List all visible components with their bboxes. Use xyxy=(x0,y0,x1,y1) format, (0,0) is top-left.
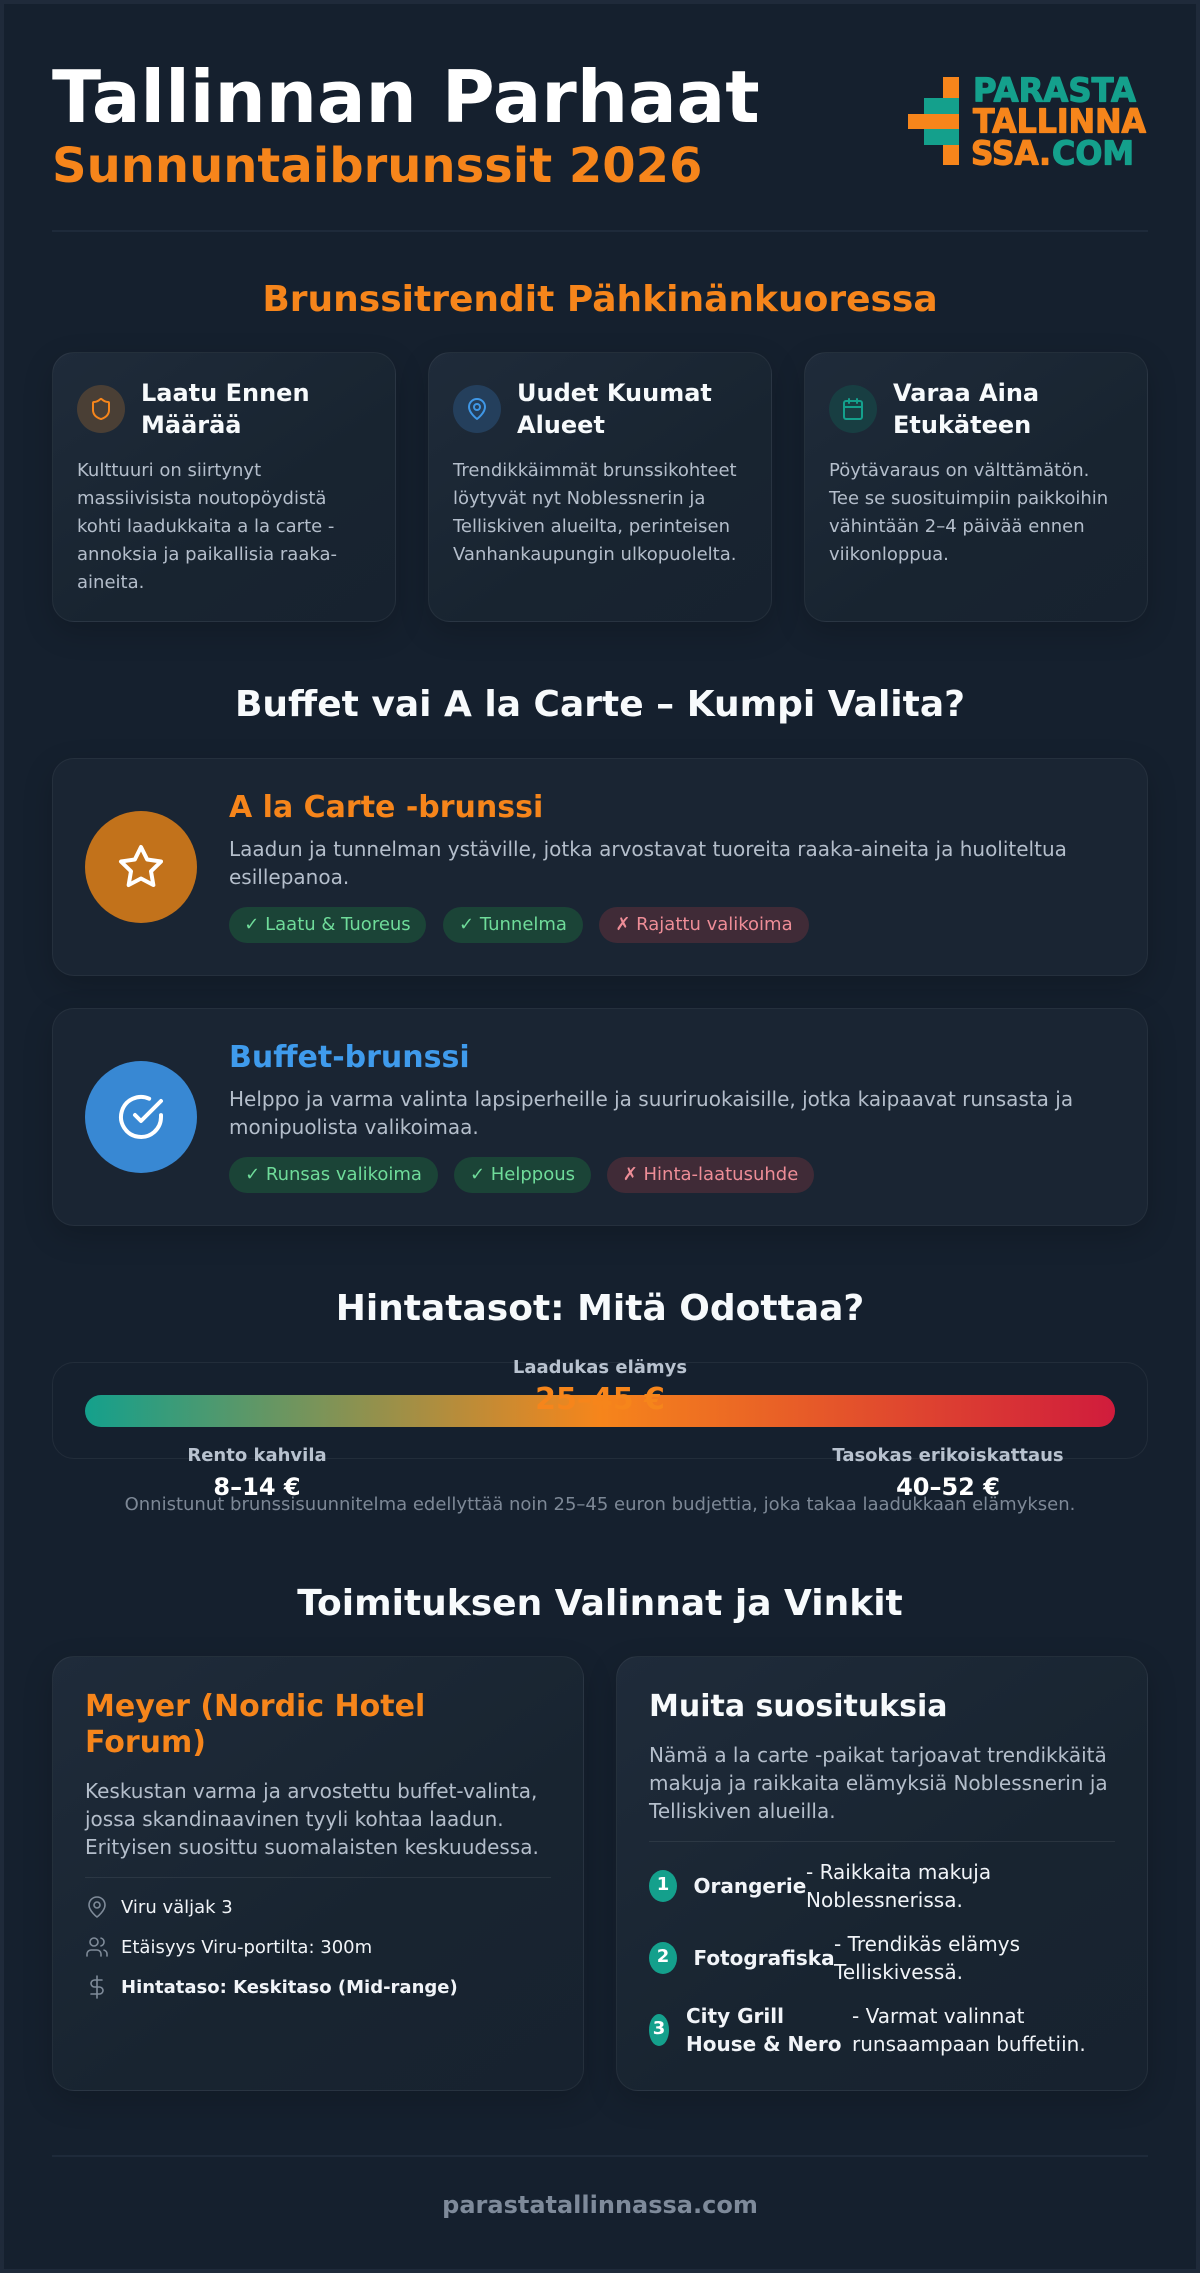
panel: price scale xyxy=(52,1362,1148,1459)
panel title: Muita suosituksia xyxy=(649,1689,948,1724)
card title xyxy=(141,379,310,438)
heading: trends: Brunssitrendit Pähkinänkuoressa xyxy=(262,279,938,320)
option text: esillepanoa. xyxy=(229,865,349,889)
card title: Uudet Kuumat xyxy=(517,379,712,407)
logo xyxy=(908,70,1146,172)
tag xyxy=(454,1157,591,1193)
card text: aineita. xyxy=(77,572,144,593)
card text: massiivisista noutopöydistä xyxy=(77,488,326,509)
price note: Onnistunut brunssisuunnitelma edellyttää noin 25–45 euron budjettia, joka takaa laadukkaan elämyksen. xyxy=(125,1494,1075,1515)
pick name: Fotografiska xyxy=(694,1946,835,1970)
panel: Meyer xyxy=(52,1656,584,2091)
panel: buffet xyxy=(52,1008,1148,1226)
card text: vähintään 2–4 päivää ennen xyxy=(829,516,1085,537)
tag: ✗ Rajattu valikoima xyxy=(615,914,793,935)
card text: Pöytävaraus on välttämätön. xyxy=(829,460,1089,481)
logo: COM xyxy=(1052,134,1134,172)
panel text: makuja ja raikkaita elämyksiä Noblessnerin ja xyxy=(649,1771,1108,1795)
pick text xyxy=(806,1860,991,1912)
subtitle: Sunnuntaibrunssit 2026 xyxy=(52,138,702,194)
panel: other picks xyxy=(616,1656,1148,2091)
footer: parastatallinnassa.com xyxy=(442,2191,758,2219)
title: Tallinnan Parhaat xyxy=(52,55,760,139)
option title: Buffet-brunssi xyxy=(229,1040,470,1075)
pick name: House & Nero xyxy=(686,2032,841,2056)
distance row xyxy=(86,1937,372,1958)
price value: mid: 25–45 € xyxy=(535,1382,665,1417)
pick text: runsaampaan buffetiin. xyxy=(852,2032,1086,2056)
pick text: - Trendikäs elämys xyxy=(834,1932,1020,1956)
tag xyxy=(443,907,583,943)
icon: map pin xyxy=(453,384,501,432)
pick name: Orangerie xyxy=(694,1874,806,1898)
panel: Meyer: Hintataso: Keskitaso (Mid-range) xyxy=(121,1977,458,1998)
option text xyxy=(229,1087,1073,1139)
panel text: Nämä a la carte -paikat tarjoavat trendikkäitä xyxy=(649,1743,1107,1767)
card title: Laatu Ennen xyxy=(141,379,310,407)
badge: 1 xyxy=(657,1874,669,1895)
badge xyxy=(649,2014,669,2046)
pick name xyxy=(686,2004,841,2056)
badge: 3 xyxy=(653,2018,665,2039)
price value: high: 40–52 € xyxy=(896,1473,1000,1501)
logo: PARASTA xyxy=(973,70,1136,110)
option title: A la Carte -brunssi xyxy=(229,790,543,825)
option text: Helppo ja varma valinta lapsiperheille ja suuriruokaisille, jotka kaipaavat runsasta ja xyxy=(229,1087,1073,1111)
pick name: City Grill xyxy=(686,2004,784,2028)
panel: trend 3 xyxy=(804,352,1148,622)
venue text: jossa skandinaavinen tyyli kohtaa laadun. xyxy=(85,1807,504,1831)
heading: picks: Toimituksen Valinnat ja Vinkit xyxy=(297,1583,903,1624)
tag xyxy=(607,1157,814,1193)
venue text: Erityisen suosittu suomalaisten keskuudessa. xyxy=(85,1835,539,1859)
badge: 2 xyxy=(657,1946,669,1967)
card text: Kulttuuri on siirtynyt xyxy=(77,460,261,481)
tag xyxy=(229,1157,438,1193)
card text: viikonloppua. xyxy=(829,544,949,565)
venue text xyxy=(84,1779,539,1859)
card text xyxy=(77,460,337,593)
heading: comparison: Buffet vai A la Carte – Kumpi Valita? xyxy=(235,684,965,725)
option text: Laadun ja tunnelman ystäville, jotka arvostavat tuoreita raaka-aineita ja huoliteltua xyxy=(229,837,1067,861)
card text: Trendikkäimmät brunssikohteet xyxy=(453,460,737,481)
pick 2 xyxy=(649,1932,1020,1984)
option text: monipuolista valikoimaa. xyxy=(229,1115,479,1139)
address row xyxy=(88,1896,233,1918)
card text: Vanhankaupungin ulkopuolelta. xyxy=(453,544,736,565)
panel text xyxy=(648,1743,1108,1823)
tag xyxy=(229,907,426,943)
tag: ✓ Helppous xyxy=(470,1164,575,1185)
card text: Telliskiven alueilta, perinteisen xyxy=(453,516,730,537)
logo: SSA. xyxy=(971,134,1051,172)
card title: Varaa Aina xyxy=(893,379,1039,407)
venue title: Meyer (Nordic Hotel xyxy=(85,1689,425,1724)
price value: low: 8–14 € xyxy=(213,1473,301,1501)
pick text: Telliskivessä. xyxy=(834,1960,963,1984)
price label: high: Tasokas erikoiskattaus xyxy=(832,1445,1064,1466)
card title: Määrää xyxy=(141,410,242,438)
icon: check circle xyxy=(85,1061,197,1173)
card text: löytyvät nyt Noblessnerin ja xyxy=(453,488,705,509)
venue title xyxy=(85,1689,425,1760)
tag: ✗ Hinta-laatusuhde xyxy=(623,1164,798,1185)
panel: a la carte xyxy=(52,758,1148,976)
card title xyxy=(893,379,1039,438)
pick text xyxy=(834,1932,1020,1984)
price label: low: Rento kahvila xyxy=(187,1445,327,1466)
panel text: Telliskiven alueilla. xyxy=(649,1799,836,1823)
panel: trend 1 xyxy=(52,352,396,622)
venue title: Forum) xyxy=(85,1725,206,1760)
badge xyxy=(649,1942,677,1974)
badge xyxy=(649,1870,677,1902)
pick text: - Raikkaita makuja xyxy=(806,1860,991,1884)
venue text: Keskustan varma ja arvostettu buffet-valinta, xyxy=(85,1779,537,1803)
icon: star xyxy=(85,811,197,923)
card text xyxy=(452,460,737,565)
tag: ✓ Runsas valikoima xyxy=(245,1164,422,1185)
card title xyxy=(517,379,712,438)
card text: kohti laadukkaita a la carte - xyxy=(77,516,334,537)
price level row xyxy=(90,1975,458,1999)
panel: Meyer: Etäisyys Viru-portilta: 300m xyxy=(121,1937,372,1958)
logo: TALLINNA xyxy=(973,102,1146,140)
card title: Etukäteen xyxy=(893,410,1031,438)
tag xyxy=(599,907,809,943)
option text xyxy=(229,837,1067,889)
pick 1 xyxy=(649,1860,991,1912)
icon: shield xyxy=(77,384,125,432)
tag: ✓ Tunnelma xyxy=(459,914,567,935)
icon: calendar xyxy=(829,384,877,432)
pick 3 xyxy=(649,2004,1086,2056)
card text: Tee se suosituimpiin paikkoihin xyxy=(829,488,1108,509)
price bar xyxy=(85,1395,1115,1427)
pick text: - Varmat valinnat xyxy=(852,2004,1024,2028)
panel: trend 2 xyxy=(428,352,772,622)
price label: mid: Laadukas elämys xyxy=(513,1357,687,1378)
card title: Alueet xyxy=(517,410,605,438)
pick text xyxy=(852,2004,1086,2056)
heading: prices: Hintatasot: Mitä Odottaa? xyxy=(336,1288,864,1329)
card text: annoksia ja paikallisia raaka- xyxy=(77,544,337,565)
panel: Meyer: Viru väljak 3 xyxy=(121,1897,233,1918)
pick text: Noblessnerissa. xyxy=(806,1888,963,1912)
tag: ✓ Laatu & Tuoreus xyxy=(244,914,411,935)
card text xyxy=(828,460,1108,565)
